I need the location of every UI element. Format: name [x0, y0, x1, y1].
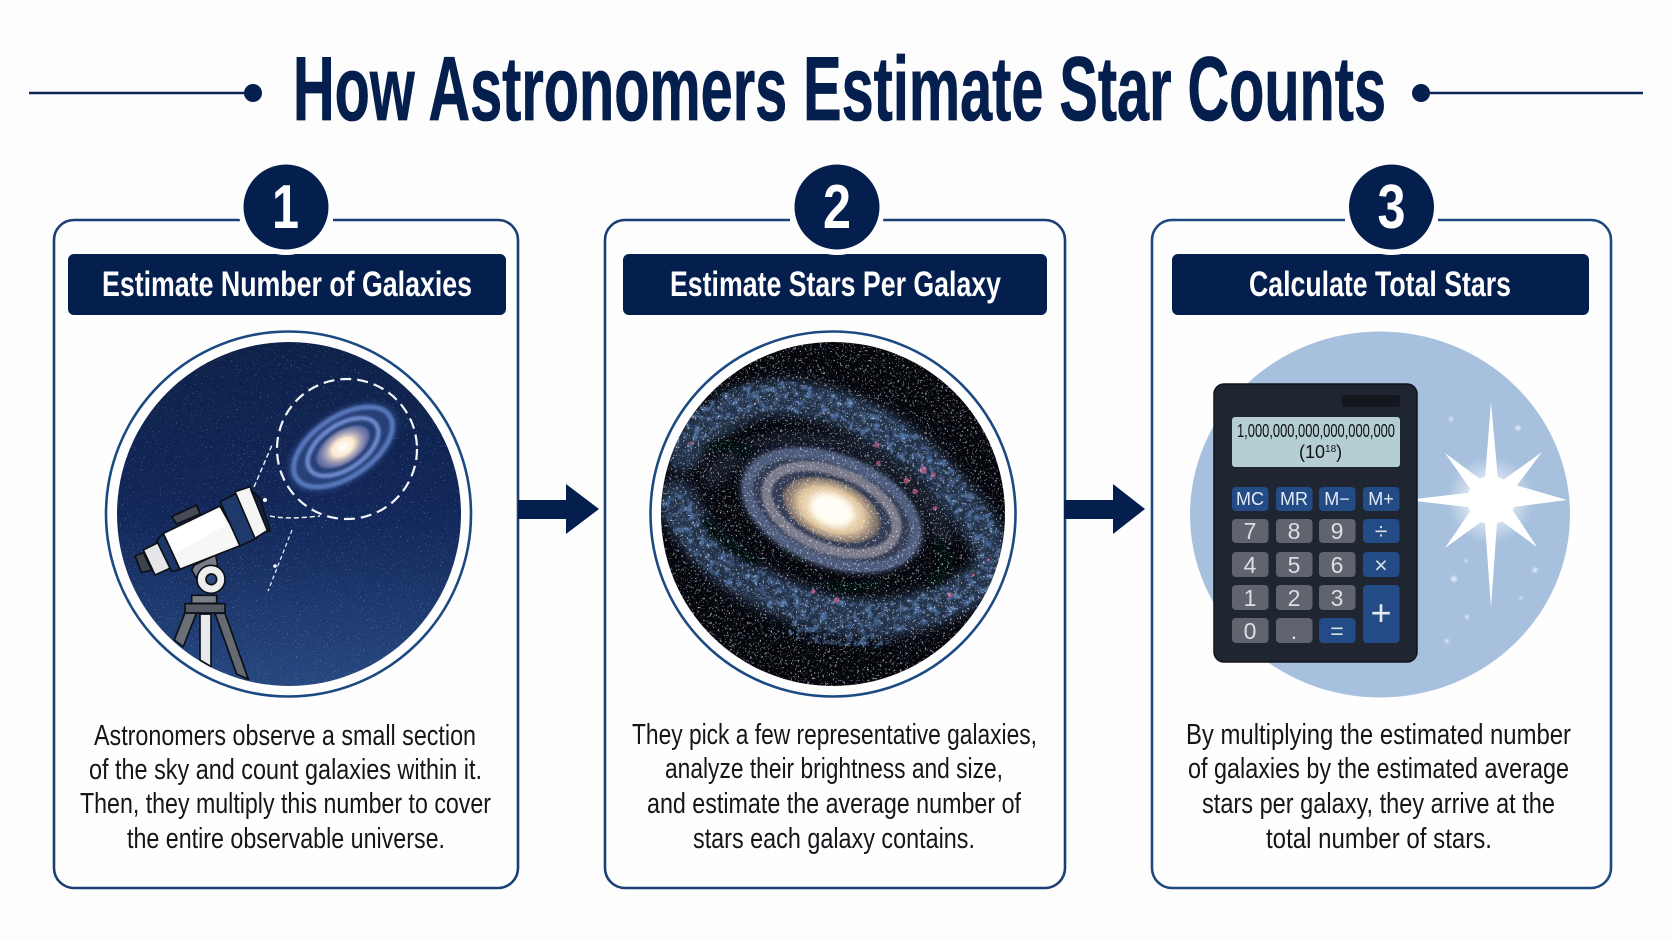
- calculator keys: ×: [1374, 552, 1388, 578]
- panel: step 1 estimate number of galaxies: [54, 159, 518, 888]
- illustration: blue disc with calculator and star: [1190, 332, 1570, 698]
- calculator display: (10: [1299, 442, 1325, 462]
- text block: step 2 description: [632, 719, 1037, 855]
- number badge 3: [1344, 159, 1440, 255]
- calculator keys: 6: [1331, 552, 1343, 578]
- calculator keys: 0: [1244, 618, 1256, 644]
- text block: step 1 description: the entire observable universe.: [127, 823, 445, 855]
- text block: step 2 description: They pick a few representative galaxies,: [632, 719, 1037, 751]
- calculator keys: M+: [1368, 489, 1394, 509]
- calculator display: 1,000,000,000,000,000,000: [1237, 421, 1395, 441]
- number badge 3: 3: [1378, 173, 1406, 242]
- calculator keys: 9: [1331, 518, 1343, 544]
- dashed survey circle: [277, 379, 417, 519]
- inner rings: [736, 443, 927, 578]
- broad arm glow: [677, 397, 997, 618]
- pink nebulae: [690, 441, 990, 603]
- text block: step 2 description: stars each galaxy contains.: [693, 823, 975, 855]
- arrow: step 1 to step 2: [518, 484, 599, 534]
- text block: step 3 description: of galaxies by the estimated average: [1188, 753, 1569, 785]
- icon: target galaxy: [286, 400, 400, 494]
- header bar: step 1: Estimate Number of Galaxies: [102, 265, 472, 304]
- dashed sight lines: [254, 445, 320, 518]
- icon: telescope on tripod: [135, 487, 270, 679]
- icon: bright star: [1407, 402, 1567, 643]
- dark dust lanes: [707, 445, 946, 587]
- calculator display: ): [1336, 442, 1342, 462]
- star field: [661, 342, 1005, 686]
- panel: step 2 estimate stars per galaxy: [605, 159, 1065, 888]
- number badge 1: 1: [272, 173, 299, 242]
- header bar: step 2: Estimate Stars Per Galaxy: [670, 265, 1001, 304]
- calculator keys: 7: [1244, 518, 1256, 544]
- calculator keys: MR: [1280, 489, 1308, 509]
- text block: step 1 description: [80, 720, 491, 855]
- calculator keys: 2: [1288, 585, 1300, 611]
- calculator keys: 5: [1288, 552, 1300, 578]
- icon: calculator: [1214, 384, 1417, 662]
- calculator keys: 3: [1331, 585, 1343, 611]
- calculator keys: M−: [1324, 489, 1350, 509]
- illustration: telescope and galaxy in night sky: [106, 332, 471, 696]
- number badge 2: 2: [823, 173, 851, 242]
- text block: step 3 description: By multiplying the estimated number: [1186, 719, 1571, 751]
- text block: step 1 description: Astronomers observe a small section: [94, 720, 476, 752]
- header bar: step 3: [1172, 254, 1589, 315]
- arrow: step 2 to step 3: [1064, 484, 1145, 534]
- calculator display: 18: [1325, 444, 1337, 455]
- calculator keys: MC: [1236, 489, 1264, 509]
- calculator keys: 4: [1244, 552, 1257, 578]
- header bar: step 3: Calculate Total Stars: [1249, 265, 1511, 304]
- header bar: step 2: [623, 254, 1047, 315]
- number badge 1: [238, 159, 334, 255]
- calculator display: [1232, 417, 1400, 467]
- calculator keys: ÷: [1375, 518, 1387, 544]
- panel: step 3 calculate total stars: [1152, 159, 1611, 888]
- text block: step 2 description: and estimate the average number of: [647, 788, 1021, 820]
- calculator keys: 8: [1288, 518, 1300, 544]
- text block: step 1 description: of the sky and count galaxies within it.: [89, 754, 482, 786]
- mottled blue spiral arms: [677, 396, 997, 637]
- text block: step 3 description: stars per galaxy, they arrive at the: [1202, 788, 1555, 820]
- illustration: spiral galaxy photo: [650, 332, 1016, 696]
- text block: step 3 description: [1186, 719, 1571, 855]
- header bar: step 1: [68, 254, 506, 315]
- text block: step 1 description: Then, they multiply this number to cover: [80, 788, 491, 820]
- calculator keys: =: [1330, 618, 1344, 644]
- calculator keys: 1: [1244, 585, 1256, 611]
- calculator keys: .: [1291, 618, 1297, 644]
- number badge 2: [789, 159, 885, 255]
- text block: step 2 description: analyze their brightness and size,: [665, 753, 1003, 785]
- calculator keys: +: [1370, 592, 1392, 633]
- calculator keys: [1232, 487, 1400, 644]
- text block: step 3 description: total number of stars.: [1266, 823, 1492, 855]
